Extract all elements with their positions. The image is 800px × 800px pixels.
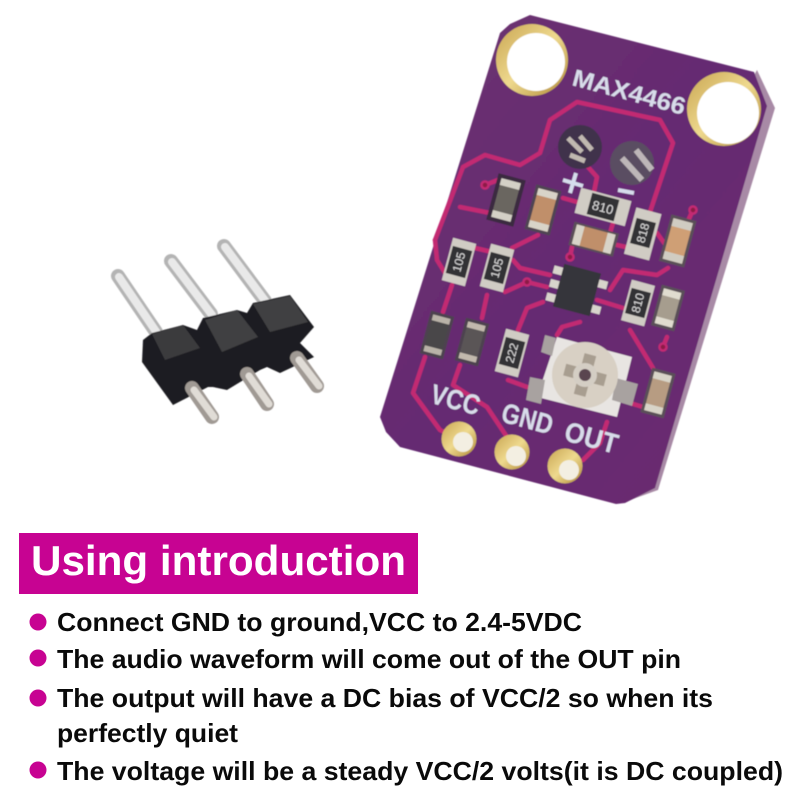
polarity marks xyxy=(563,173,634,193)
trimmer potentiometer xyxy=(526,335,638,417)
upper pins xyxy=(118,246,266,333)
black plastic body xyxy=(142,295,314,405)
board silkscreen labels: VCC xyxy=(427,378,484,421)
board surface xyxy=(380,15,767,504)
amplifier chip xyxy=(544,262,610,318)
bullet: steady voltage: The voltage will be a steady VCC/2 volts(it is DC coupled) xyxy=(57,756,783,786)
capacitor C2 xyxy=(524,184,562,236)
resistor 810 xyxy=(575,188,631,226)
board silkscreen labels xyxy=(427,65,688,460)
capacitor C8 xyxy=(640,368,676,418)
resistor 222 xyxy=(495,329,529,377)
lower pins xyxy=(192,358,319,417)
board silkscreen labels: OUT xyxy=(561,416,622,460)
resistor 818 xyxy=(624,207,662,261)
mounting holes xyxy=(496,24,761,146)
capacitor C6 xyxy=(420,311,454,359)
microphone solder pads xyxy=(558,125,654,193)
surface mount components xyxy=(420,173,697,418)
resistor 105 right: 105 xyxy=(488,256,506,279)
circuit board xyxy=(380,15,775,504)
resistor 810 lower xyxy=(621,280,655,326)
resistor 810: 810 xyxy=(590,197,615,218)
bullet: connect: Connect GND to ground,VCC to 2.4-5VDC xyxy=(57,607,582,637)
capacitor C5 xyxy=(651,285,685,331)
board silkscreen labels: GND xyxy=(498,397,557,441)
bullet: waveform: The audio waveform will come out of the OUT pin xyxy=(57,644,681,674)
heading banner: Using introduction xyxy=(31,537,406,584)
capacitor C7 xyxy=(455,318,489,366)
capacitor C1 xyxy=(486,173,526,227)
vias xyxy=(482,182,696,350)
capacitor C3 xyxy=(568,222,619,257)
copper traces xyxy=(413,102,693,460)
through-hole pads xyxy=(442,422,582,484)
resistor 105 left xyxy=(442,238,476,286)
board edge thickness xyxy=(600,70,775,503)
resistor 222: 222 xyxy=(503,341,521,364)
resistor 818: 818 xyxy=(634,221,652,244)
bullet: DC bias xyxy=(30,683,713,748)
resistor 105 right xyxy=(480,244,514,292)
pin header xyxy=(118,246,319,417)
resistor 810 lower: 810 xyxy=(629,291,647,314)
capacitor C4 xyxy=(659,214,697,268)
body top faces xyxy=(152,325,200,360)
bullet: DC bias: The output will have a DC bias of VCC/2 so when its xyxy=(57,683,713,713)
resistor 105 left: 105 xyxy=(450,250,468,273)
bullet: DC bias: perfectly quiet xyxy=(57,718,238,748)
board silkscreen labels: MAX4466 xyxy=(569,65,688,121)
